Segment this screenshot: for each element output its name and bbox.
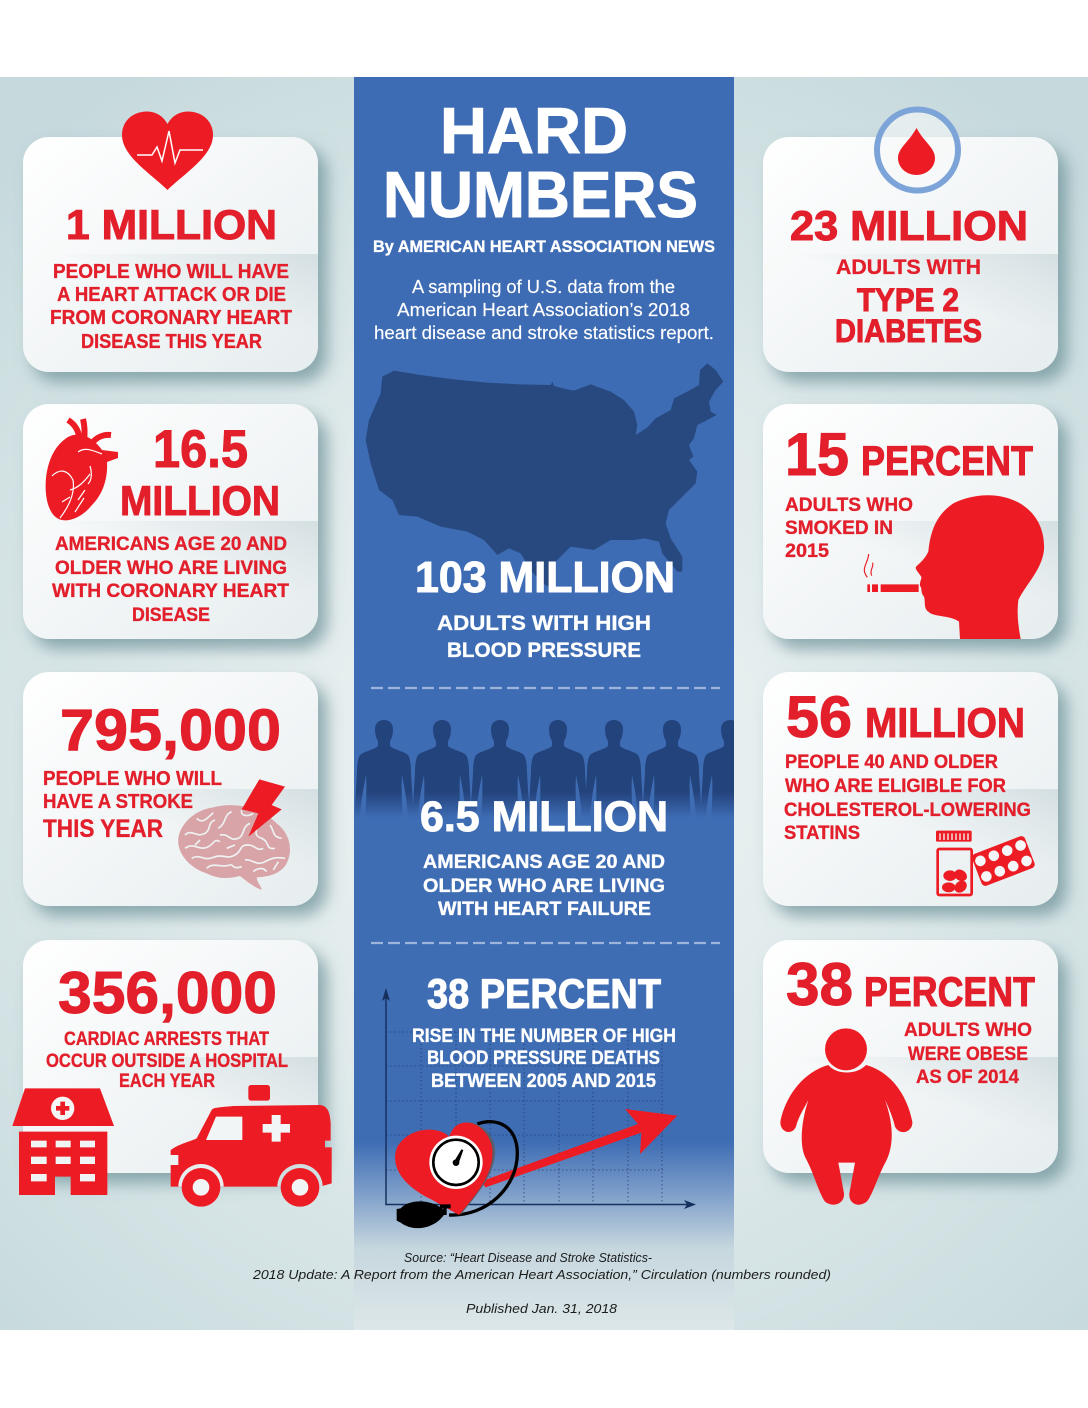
description: CARDIAC ARRESTS THAT bbox=[64, 1029, 269, 1050]
description: STATINS bbox=[784, 822, 860, 844]
description: ADULTS WHO bbox=[785, 494, 913, 516]
heading: 16.5 bbox=[153, 420, 248, 479]
heading: 15 bbox=[785, 421, 849, 488]
heading: 795,000 bbox=[60, 698, 281, 763]
description: AMERICANS AGE 20 AND bbox=[55, 533, 287, 555]
arrow: upward trend bbox=[481, 1109, 677, 1187]
panel: 15 percent card bbox=[763, 404, 1058, 639]
description bbox=[785, 494, 913, 562]
description bbox=[835, 256, 982, 349]
icon: head smoking a cigarette bbox=[864, 495, 1044, 639]
description: HAVE A STROKE bbox=[43, 791, 193, 813]
description bbox=[43, 768, 222, 843]
stat: 6.5 million: AMERICANS AGE 20 AND bbox=[423, 851, 665, 873]
stat: 103 million bbox=[415, 553, 675, 662]
stat: 38 percent rise: BLOOD PRESSURE DEATHS bbox=[427, 1047, 660, 1069]
description bbox=[46, 1029, 288, 1092]
stat: 6.5 million: 6.5 MILLION bbox=[420, 793, 668, 841]
stat: 6.5 million: WITH HEART FAILURE bbox=[438, 898, 651, 920]
description bbox=[904, 1019, 1032, 1088]
icon: blood drop in ring bbox=[877, 110, 958, 190]
heading bbox=[786, 951, 1035, 1018]
stat: 103 million: 103 MILLION bbox=[415, 553, 675, 602]
description: AS OF 2014 bbox=[916, 1066, 1019, 1088]
description bbox=[52, 533, 289, 626]
heading: PERCENT bbox=[861, 437, 1033, 484]
icon: row of people silhouettes bbox=[354, 720, 734, 814]
heading: 38 bbox=[786, 951, 853, 1018]
source and publication note: Source: “Heart Disease and Stroke Statistics- bbox=[404, 1250, 653, 1265]
source and publication note: 2018 Update: A Report from the American Heart Association,” Circulation (numbers rounded) bbox=[252, 1267, 831, 1282]
intro text: American Heart Association’s 2018 bbox=[397, 300, 690, 320]
description: FROM CORONARY HEART bbox=[50, 307, 292, 329]
panel: 38 percent obesity card bbox=[763, 940, 1058, 1205]
description: ADULTS WITH bbox=[836, 256, 981, 279]
stat: 103 million: ADULTS WITH HIGH bbox=[437, 612, 651, 635]
icon: brain with lightning bolt bbox=[178, 779, 290, 890]
description: SMOKED IN bbox=[785, 517, 893, 539]
heading: 56 bbox=[786, 685, 852, 750]
heading: 1 MILLION bbox=[66, 201, 277, 248]
panel: 16.5 million card bbox=[23, 404, 318, 639]
panel: 356,000 card bbox=[12, 940, 332, 1207]
description: ADULTS WHO bbox=[904, 1019, 1032, 1041]
icon: obese person bbox=[780, 1028, 912, 1205]
title: HARD bbox=[440, 94, 628, 167]
panel: 795,000 card bbox=[23, 672, 318, 906]
description: DIABETES bbox=[835, 313, 982, 349]
icon: hospital bbox=[12, 1088, 114, 1195]
description: EACH YEAR bbox=[119, 1071, 215, 1092]
description bbox=[50, 261, 292, 353]
description: THIS YEAR bbox=[43, 815, 163, 843]
heading bbox=[120, 420, 280, 524]
icon: ambulance bbox=[171, 1085, 332, 1207]
description: DISEASE THIS YEAR bbox=[81, 331, 262, 353]
description: DISEASE bbox=[132, 604, 210, 626]
description: 2015 bbox=[785, 540, 829, 562]
heading: 23 MILLION bbox=[790, 202, 1028, 249]
description: WHO ARE ELIGIBLE FOR bbox=[785, 775, 1006, 797]
heading: PERCENT bbox=[864, 968, 1035, 1015]
title bbox=[383, 94, 698, 231]
heading: MILLION bbox=[865, 699, 1025, 746]
panel: centre column bbox=[354, 77, 760, 1330]
panel: 1 million card bbox=[23, 112, 318, 372]
map: United States silhouette bbox=[366, 363, 723, 587]
stat: 6.5 million bbox=[420, 793, 668, 920]
source and publication note bbox=[252, 1250, 831, 1316]
description bbox=[784, 751, 1031, 844]
icon: pill bottle and blister pack bbox=[936, 831, 1036, 895]
heading: MILLION bbox=[120, 477, 280, 524]
description: WERE OBESE bbox=[908, 1043, 1028, 1065]
heading bbox=[786, 685, 1025, 750]
heading bbox=[785, 421, 1033, 488]
description: PEOPLE WHO WILL HAVE bbox=[53, 261, 289, 283]
stat: 38 percent rise bbox=[412, 970, 676, 1092]
description: OCCUR OUTSIDE A HOSPITAL bbox=[46, 1051, 288, 1072]
intro text: A sampling of U.S. data from the bbox=[412, 277, 675, 297]
stat: 6.5 million: OLDER WHO ARE LIVING bbox=[423, 875, 665, 897]
intro text: heart disease and stroke statistics report. bbox=[374, 323, 714, 343]
description: WITH CORONARY HEART bbox=[52, 580, 289, 602]
intro text bbox=[374, 277, 714, 343]
description: PEOPLE WHO WILL bbox=[43, 768, 222, 790]
title: NUMBERS bbox=[383, 158, 698, 231]
icon: heart with heartbeat bbox=[122, 112, 213, 190]
description: CHOLESTEROL-LOWERING bbox=[784, 799, 1031, 821]
source and publication note: Published Jan. 31, 2018 bbox=[466, 1301, 618, 1316]
description: PEOPLE 40 AND OLDER bbox=[785, 751, 998, 773]
description: OLDER WHO ARE LIVING bbox=[55, 557, 287, 579]
stat: 38 percent rise: RISE IN THE NUMBER OF HIGH bbox=[412, 1025, 676, 1047]
panel: 56 million card bbox=[763, 672, 1058, 906]
stat: 38 percent rise: 38 PERCENT bbox=[427, 970, 661, 1017]
byline: By AMERICAN HEART ASSOCIATION NEWS bbox=[373, 238, 715, 256]
icon: heart with pressure gauge bbox=[395, 1122, 517, 1228]
panel: 23 million card bbox=[763, 110, 1058, 372]
heading: 356,000 bbox=[58, 960, 277, 1026]
description: A HEART ATTACK OR DIE bbox=[57, 284, 286, 306]
chart: rising blood pressure deaths bbox=[382, 988, 696, 1228]
stat: 103 million: BLOOD PRESSURE bbox=[447, 639, 641, 662]
description: TYPE 2 bbox=[857, 282, 959, 318]
stat: 38 percent rise: BETWEEN 2005 AND 2015 bbox=[431, 1070, 656, 1092]
icon: anatomical heart bbox=[46, 419, 118, 520]
